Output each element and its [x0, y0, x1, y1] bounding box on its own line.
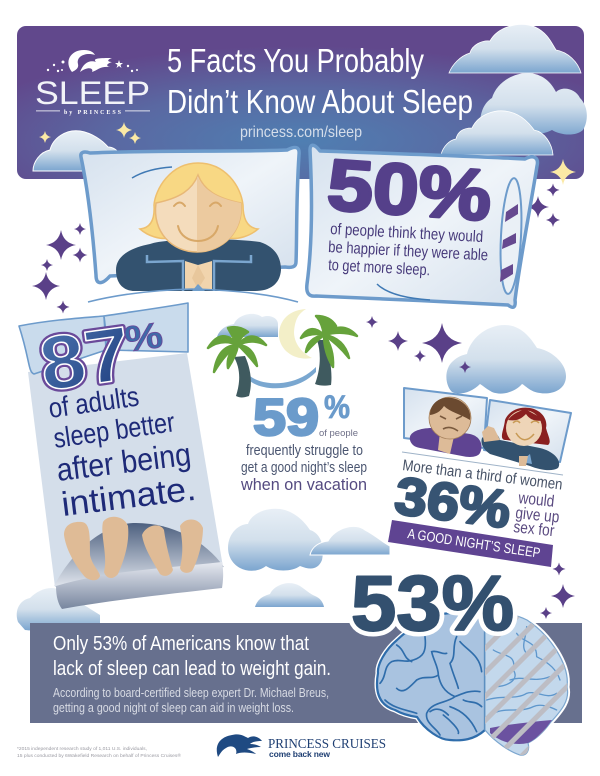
- white halo: [377, 609, 568, 755]
- footnote: [17, 746, 182, 758]
- clouds: centre: [228, 509, 390, 607]
- pillows: [19, 316, 106, 374]
- left hemisphere: [377, 610, 485, 740]
- man: [410, 397, 482, 457]
- 50% caption: to get more sleep.: [328, 257, 431, 279]
- url: princess.com/sleep: [240, 124, 362, 141]
- logo mark: [217, 734, 262, 757]
- illustration: palm trees, moon and hammock: [208, 309, 357, 398]
- footer: princess cruises logo: [217, 734, 386, 759]
- 59 figure: 59: [253, 389, 319, 447]
- pillow: 50% stat: [307, 145, 537, 307]
- hammock: [250, 367, 316, 388]
- pillow crease: [377, 284, 430, 300]
- logo: sleep by princess: [35, 50, 150, 116]
- blanket mound: [54, 523, 224, 586]
- character: blonde sleeper: [116, 163, 281, 291]
- panel: weight gain: [30, 623, 582, 723]
- logo: sleep by princess: SLEEP: [35, 75, 150, 111]
- 36 caption: would: [517, 489, 555, 511]
- icon: brain: [377, 609, 568, 755]
- bed line: [402, 452, 563, 475]
- sheet: [28, 353, 223, 587]
- title: [167, 42, 473, 120]
- header banner: [17, 24, 587, 185]
- 50% figure: 50%: [325, 145, 494, 236]
- star on cloud: [459, 361, 471, 373]
- body: [116, 239, 281, 291]
- band headline: lack of sleep can lead to weight gain.: [53, 658, 331, 680]
- hatch overlay: [485, 612, 568, 755]
- band headline: Only 53% of Americans know that: [53, 633, 309, 655]
- pillow: sleeping woman: [81, 147, 299, 291]
- percent sign: %: [324, 389, 350, 425]
- intro line: More than a third of women: [402, 457, 563, 494]
- 59% stat: [240, 389, 367, 494]
- brain folds: [380, 627, 560, 735]
- banner: [388, 520, 553, 567]
- blanket fold: [56, 562, 223, 609]
- pillow crease: [132, 167, 172, 178]
- 87 figure: [35, 306, 170, 408]
- woman: [481, 408, 559, 470]
- 87 figure: %: [122, 314, 165, 360]
- face: [155, 175, 241, 252]
- cloud: bottom left behind bed: [17, 588, 100, 630]
- cloud: header middle right: [480, 73, 587, 137]
- title: 5 Facts You Probably: [167, 42, 424, 79]
- right palm: [301, 316, 357, 386]
- smile: [174, 202, 221, 241]
- band subtext: getting a good night of sleep can aid in weight loss.: [53, 701, 294, 715]
- 87 caption: [47, 381, 198, 524]
- 87 caption: intimate.: [59, 470, 198, 524]
- cloud: with star right: [446, 325, 566, 394]
- cloud: header left: [33, 131, 127, 171]
- pillows: [404, 388, 487, 448]
- band subtext: According to board-certified sleep expert Dr. Michael Breus,: [53, 686, 329, 700]
- left palm: [208, 327, 266, 398]
- banner: A GOOD NIGHT’S SLEEP: [407, 525, 541, 561]
- cloud behind palms: [217, 314, 278, 337]
- moon: [279, 309, 312, 359]
- logo: sleep by princess: by PRINCESS: [64, 110, 122, 116]
- 50% caption: of people think they would: [330, 221, 483, 246]
- 36% figure: 36%: [391, 466, 514, 540]
- tagline: come back new: [269, 749, 330, 759]
- brand name: PRINCESS CRUISES: [268, 737, 386, 752]
- feet: [64, 517, 203, 580]
- 36 caption: [513, 489, 560, 540]
- purple patch: [490, 720, 552, 744]
- cloud: header top right: [449, 24, 581, 73]
- couple: 36% stat: [388, 388, 571, 567]
- cloud: header lower right: [441, 111, 553, 155]
- footnote: 15 plus conducted by 6Wakefield Research on behalf of Princess Cruises®: [17, 752, 182, 758]
- blanket lines: [88, 289, 298, 302]
- right hemisphere: [485, 612, 568, 755]
- stars: header: [39, 122, 576, 185]
- 59 caption: frequently struggle to: [246, 442, 363, 459]
- stars: purple sparkles: [32, 184, 575, 619]
- footnote: *2015 independent research study of 1,011 U.S. individuals,: [17, 746, 147, 751]
- 36 caption: sex for: [513, 518, 556, 540]
- 59% stat: get a good night’s sleep: [241, 459, 367, 476]
- 87 figure: 87: [35, 311, 136, 408]
- band subtext: [53, 686, 329, 715]
- 87 caption: after being: [54, 436, 193, 488]
- band headline: [53, 633, 331, 680]
- hands: [185, 261, 212, 289]
- sleeves: [147, 255, 251, 291]
- 87 caption: sleep better: [52, 406, 177, 454]
- hair: [140, 163, 258, 239]
- 50% caption: [328, 221, 489, 279]
- 50% caption: be happier if they were able: [328, 239, 489, 264]
- 36 caption: give up: [515, 504, 560, 527]
- 53% figure: 53%: [351, 559, 514, 647]
- 59% stat: when on vacation: [240, 475, 367, 494]
- pillow tag with stripes: [498, 178, 524, 294]
- 87 figure: 87: [35, 311, 136, 408]
- title: Didn’t Know About Sleep: [167, 83, 473, 120]
- of people: of people: [319, 428, 358, 439]
- 53% figure: 53%: [351, 559, 514, 647]
- bed: 87% stat: [19, 303, 224, 609]
- 87 caption: of adults: [47, 381, 141, 424]
